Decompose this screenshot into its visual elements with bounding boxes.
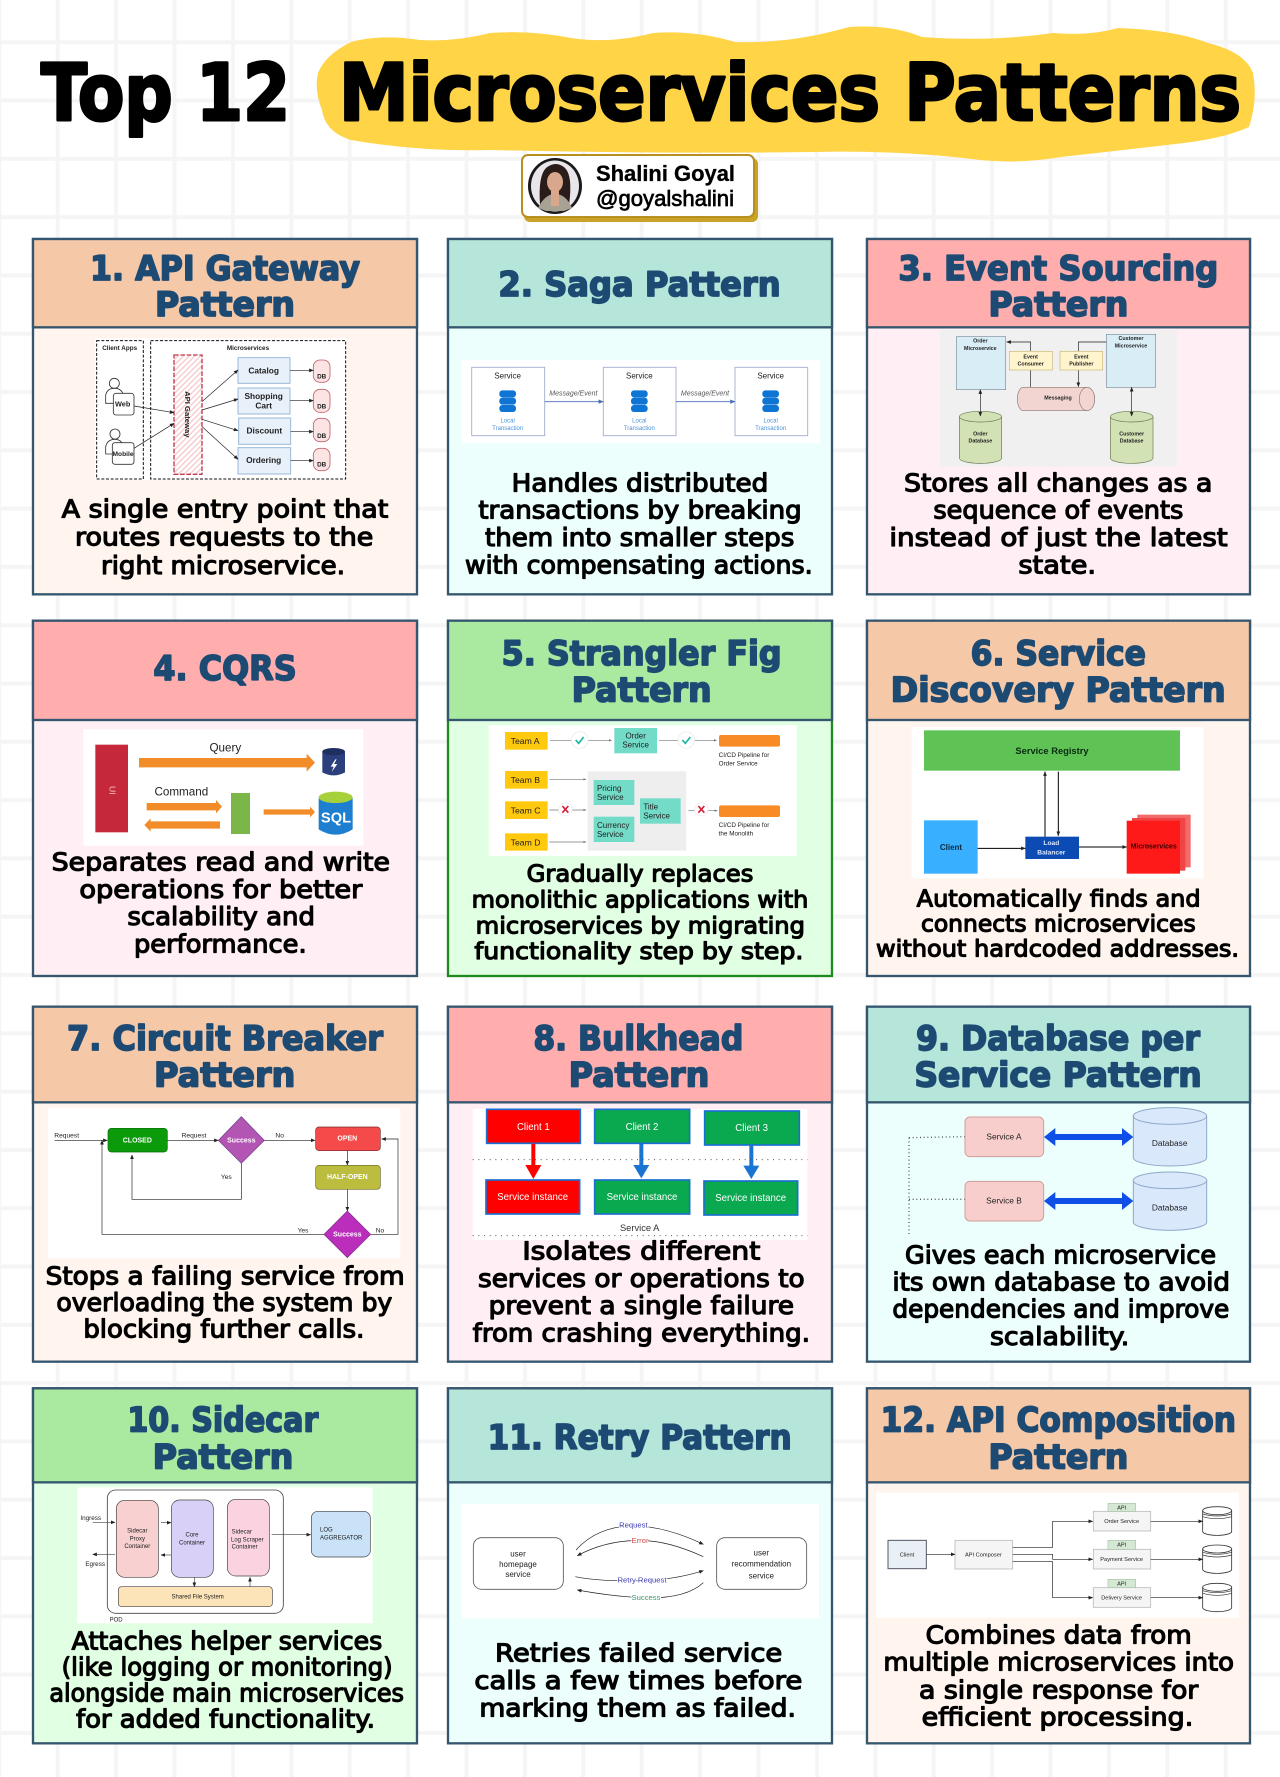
diagram: strangler fig: [489, 725, 797, 856]
diagram: bulkhead: Client 1: [517, 1122, 550, 1133]
diagram: circuit breaker: Yes: [221, 1174, 232, 1181]
panel 12: API Composition Pattern: [867, 1388, 1250, 1743]
diagram: service discovery: Service Registry: [1015, 746, 1089, 756]
author name: Shalini Goyal: [596, 161, 735, 186]
heading: [881, 1401, 1236, 1477]
description: microservices by migrating: [476, 911, 805, 939]
heading: Service Pattern: [914, 1056, 1202, 1096]
description: [892, 1240, 1230, 1351]
diagram: circuit breaker: No: [376, 1227, 385, 1234]
diagram: retry: [462, 1504, 819, 1618]
diagram: event sourcing: Customer: [1119, 336, 1143, 342]
diagram: database per service: Database: [1152, 1138, 1188, 1148]
panel frame: [33, 1388, 417, 1743]
heading: Pattern: [988, 1437, 1128, 1477]
diagram: circuit breaker: Request: [182, 1133, 207, 1140]
diagram: saga services: Transaction: [624, 426, 655, 432]
panel 3: Event Sourcing Pattern: [867, 239, 1250, 594]
diagram: strangler fig: Service: [622, 741, 650, 750]
diagram: service discovery: [912, 727, 1203, 878]
diagram: API gateway: Shopping: [244, 391, 283, 401]
diagram: API composition: Delivery Service: [1101, 1595, 1142, 1601]
diagram: API gateway: Microservices: [227, 345, 270, 352]
diagram: retry: user: [510, 1550, 526, 1559]
diagram: strangler fig: Currency: [597, 821, 629, 830]
diagram: strangler fig: Service: [597, 793, 624, 802]
diagram: retry: Error: [631, 1536, 649, 1545]
description: [46, 1261, 405, 1343]
diagram: event sourcing: Publisher: [1069, 362, 1093, 368]
diagram: strangler fig: CI/CD Pipeline for: [719, 752, 769, 759]
heading: [90, 249, 360, 325]
diagram: circuit breaker: No: [275, 1133, 284, 1140]
diagram: retry: recommendation: [732, 1560, 791, 1569]
diagram: sidecar: Container: [232, 1545, 258, 1551]
description: marking them as failed.: [479, 1694, 796, 1723]
description: them into smaller steps: [485, 523, 794, 552]
heading: [502, 634, 782, 711]
heading: 5. Strangler Fig: [502, 634, 782, 674]
diagram: service discovery: Client: [940, 843, 962, 852]
diagram: sidecar: Core: [186, 1533, 199, 1539]
diagram: saga services: Service: [757, 371, 785, 380]
panel 11: Retry Pattern: [448, 1388, 832, 1743]
diagram: strangler fig: Team D: [511, 838, 540, 848]
diagram: sidecar: Log Scraper: [231, 1537, 264, 1543]
author badge: [522, 155, 758, 222]
diagram: strangler fig: Order: [625, 732, 646, 741]
diagram: bulkhead: Service instance: [715, 1193, 786, 1204]
diagram: circuit breaker: [48, 1108, 400, 1258]
diagram: API composition: Client: [900, 1552, 915, 1558]
panel frame: [867, 1388, 1250, 1743]
diagram: bulkhead: Service A: [620, 1223, 660, 1233]
title highlight blob: [317, 26, 1255, 161]
heading: Pattern: [155, 285, 295, 325]
description: Gives each microservice: [905, 1240, 1216, 1269]
description: Handles distributed: [512, 469, 768, 498]
heading: [127, 1401, 319, 1477]
description: [465, 469, 813, 579]
diagram: saga services: Service: [494, 371, 522, 380]
panel 7: Circuit Breaker Pattern: [33, 1007, 417, 1362]
heading: 3. Event Sourcing: [898, 249, 1218, 289]
diagram: API gateway: Web: [115, 400, 131, 409]
heading: Pattern: [988, 285, 1128, 325]
diagram: event sourcing: Customer: [1119, 431, 1144, 437]
panel frame: [33, 1007, 417, 1362]
description: transactions by breaking: [478, 496, 802, 525]
panel frame: [448, 239, 832, 594]
diagram: API composition: API: [1117, 1542, 1127, 1548]
diagram: sidecar: Egress: [85, 1561, 105, 1568]
heading: Pattern: [154, 1056, 295, 1096]
diagram: sidecar: Container: [179, 1540, 205, 1546]
description: Separates read and write: [52, 848, 390, 877]
diagram: CQRS: Command: [154, 785, 208, 798]
panel 8: Bulkhead Pattern: [448, 1007, 832, 1362]
description: Automatically finds and: [917, 885, 1201, 913]
diagram: event sourcing: Event: [1074, 355, 1089, 361]
diagram: retry: user: [754, 1548, 769, 1557]
diagram: sidecar: Container: [124, 1544, 150, 1550]
diagram: sidecar: POD: [110, 1617, 123, 1623]
diagram: strangler fig: Team A: [511, 736, 540, 746]
diagram: API gateway: API Gateway: [183, 391, 192, 438]
diagram: strangler fig: Order Service: [719, 760, 758, 767]
diagram: bulkhead: Service instance: [497, 1192, 568, 1203]
diagram: event sourcing: Consumer: [1017, 362, 1044, 368]
diagram: API gateway: [95, 338, 347, 480]
diagram: circuit breaker: Request: [54, 1133, 79, 1140]
diagram: API composition: API: [1117, 1581, 1127, 1587]
heading: 9. Database per: [916, 1019, 1200, 1059]
description: [52, 848, 390, 958]
description: scalability.: [990, 1322, 1129, 1351]
description: from crashing everything.: [473, 1319, 810, 1348]
description: [62, 494, 389, 580]
diagram: circuit breaker: Success: [227, 1137, 256, 1144]
description: for added functionality.: [76, 1705, 375, 1734]
description: [876, 885, 1239, 963]
diagram: sidecar: Sidecar: [232, 1529, 252, 1535]
description: (like logging or monitoring): [62, 1653, 393, 1682]
diagram: event sourcing: Database: [1120, 439, 1144, 445]
diagram: strangler fig: Service: [643, 811, 671, 820]
description: connects microservices: [921, 910, 1196, 938]
description: calls a few times before: [474, 1666, 802, 1695]
diagram: database per service: Service B: [986, 1196, 1022, 1206]
diagram: API gateway: DB: [317, 404, 327, 411]
heading: 8. Bulkhead: [533, 1019, 743, 1059]
description: Stores all changes as a: [904, 469, 1212, 498]
description: state.: [1018, 550, 1096, 579]
panel frame: [867, 621, 1250, 976]
diagram: sidecar: [77, 1487, 373, 1623]
heading: [914, 1019, 1202, 1096]
diagram: event sourcing: [940, 330, 1177, 467]
diagram: API gateway: Cart: [255, 401, 272, 411]
panel 1: API Gateway Pattern: [33, 239, 417, 594]
panel 10: Sidecar Pattern: [33, 1388, 417, 1743]
diagram: database per service: Service A: [986, 1131, 1022, 1141]
diagram: CQRS: [83, 729, 363, 846]
diagram: sidecar: Ingress: [80, 1515, 101, 1522]
diagram: API gateway: DB: [317, 461, 327, 468]
diagram: strangler fig: the Monolith: [719, 831, 754, 838]
heading: 11. Retry Pattern: [488, 1418, 792, 1458]
diagram: event sourcing: Messaging: [1044, 395, 1072, 401]
diagram: saga services: Local: [764, 419, 778, 425]
diagram: saga services: Message/Event: [549, 391, 598, 398]
description: Stops a failing service from: [46, 1261, 405, 1290]
diagram: saga services: Message/Event: [681, 391, 730, 398]
diagram: event sourcing: Event: [1023, 355, 1038, 361]
heading: [533, 1019, 743, 1096]
panel frame: [867, 239, 1250, 594]
diagram: API gateway: DB: [317, 433, 327, 440]
diagram: saga services: Service: [626, 371, 653, 380]
diagram: sidecar: AGGREGATOR: [320, 1535, 363, 1541]
description: Retries failed service: [495, 1639, 782, 1668]
diagram: service discovery: Balancer: [1037, 849, 1066, 856]
diagram: saga services: Transaction: [755, 426, 786, 432]
diagram: retry: Request: [619, 1521, 648, 1530]
diagram: event sourcing: Order: [973, 339, 988, 345]
diagram: event sourcing: Order: [973, 431, 988, 437]
diagram: CQRS: UI: [108, 786, 118, 795]
heading: Pattern: [572, 671, 712, 711]
heading: 12. API Composition: [881, 1401, 1236, 1441]
description: [889, 469, 1228, 579]
description: Gradually replaces: [527, 860, 753, 888]
heading: Pattern: [569, 1056, 709, 1096]
description: monolithic applications with: [472, 886, 808, 914]
author handle: @goyalshalini: [596, 186, 734, 211]
heading: [891, 634, 1226, 711]
description: services or operations to: [478, 1264, 805, 1293]
description: performance.: [134, 929, 307, 958]
diagram: circuit breaker: Yes: [298, 1227, 309, 1234]
diagram: retry: service: [749, 1571, 775, 1580]
title word: Top 12: Top 12: [41, 49, 290, 139]
diagram: circuit breaker: CLOSED: [123, 1137, 152, 1144]
panel 4: CQRS: [33, 621, 417, 976]
diagram: API gateway: Mobile: [112, 451, 134, 458]
panel 2: Saga Pattern: [448, 239, 832, 594]
diagram: bulkhead: [473, 1109, 807, 1240]
panel frame: [867, 1007, 1250, 1362]
diagram: database per service: [909, 1108, 1207, 1237]
diagram: sidecar: Shared File System: [172, 1594, 224, 1600]
diagram: service discovery: Load: [1043, 840, 1059, 847]
description: routes requests to the: [75, 523, 373, 552]
diagram: API gateway: DB: [317, 374, 327, 381]
diagram: API composition: [876, 1493, 1239, 1618]
heading: 7. Circuit Breaker: [67, 1019, 383, 1059]
diagram: circuit breaker: Success: [333, 1232, 362, 1239]
description: operations for better: [79, 875, 363, 904]
diagram: retry: homepage: [499, 1560, 537, 1569]
description: instead of just the latest: [889, 523, 1228, 552]
diagram: strangler fig: Title: [643, 802, 659, 811]
diagram: sidecar: LOG: [320, 1528, 333, 1534]
description: overloading the system by: [56, 1288, 392, 1317]
description: multiple microservices into: [883, 1648, 1234, 1677]
description: functionality step by step.: [474, 937, 803, 965]
diagram: strangler fig: CI/CD Pipeline for: [719, 822, 769, 829]
description: dependencies and improve: [892, 1295, 1229, 1324]
diagram: sidecar: Sidecar: [127, 1529, 147, 1535]
diagram: API gateway: Ordering: [246, 455, 281, 465]
panel frame: [33, 621, 417, 976]
panel frame: [33, 239, 417, 594]
description: scalability and: [127, 902, 315, 931]
diagram: event sourcing: Microservice: [964, 346, 997, 352]
description: its own database to avoid: [892, 1268, 1230, 1297]
description: right microservice.: [101, 551, 345, 580]
diagram: CQRS: SQL: [321, 811, 351, 827]
diagram: saga services: Local: [632, 419, 646, 425]
diagram: bulkhead: Client 3: [735, 1123, 768, 1134]
description: efficient processing.: [922, 1703, 1193, 1732]
diagram: strangler fig: Pricing: [597, 784, 621, 793]
description: [472, 860, 808, 965]
diagram: saga services: Local: [501, 419, 515, 425]
diagram: saga services: Transaction: [492, 426, 523, 432]
heading: 6. Service: [971, 634, 1146, 674]
diagram: API gateway: Catalog: [248, 365, 279, 375]
diagram: bulkhead: Service instance: [607, 1192, 677, 1203]
panel 6: Service Discovery Pattern: [867, 621, 1250, 976]
heading: [67, 1019, 383, 1096]
diagram: API gateway: Discount: [247, 426, 282, 436]
heading: 4. CQRS: [153, 649, 297, 689]
diagram: API composition: API Composer: [965, 1552, 1002, 1558]
description: [49, 1626, 404, 1734]
description: Attaches helper services: [72, 1626, 382, 1655]
heading: [898, 249, 1218, 325]
diagram: CQRS: Query: [209, 742, 241, 755]
title: Top 12 Microservices Patterns: [41, 26, 1255, 161]
diagram: strangler fig: Team B: [511, 775, 540, 785]
description: blocking further calls.: [83, 1314, 364, 1343]
diagram: retry: Retry Request: [618, 1576, 667, 1585]
description: Isolates different: [522, 1236, 761, 1265]
diagram: API composition: Payment Service: [1100, 1557, 1143, 1563]
description: Combines data from: [926, 1620, 1192, 1649]
heading: 1. API Gateway: [90, 249, 360, 289]
diagram: circuit breaker: OPEN: [337, 1136, 357, 1143]
diagram: API composition: Order Service: [1104, 1519, 1139, 1525]
heading: Pattern: [153, 1437, 293, 1477]
description: sequence of events: [933, 496, 1183, 525]
heading: Discovery Pattern: [891, 671, 1226, 711]
diagram: API gateway: Client Apps: [102, 345, 138, 352]
panel 9: Database per Service Pattern: [867, 1007, 1250, 1362]
diagram: strangler fig: Team C: [511, 805, 540, 815]
description: prevent a single failure: [489, 1291, 794, 1320]
description: [883, 1620, 1234, 1732]
diagram: circuit breaker: HALF-OPEN: [327, 1174, 368, 1181]
description: a single response for: [919, 1675, 1199, 1704]
description: [474, 1639, 802, 1723]
diagram: event sourcing: Database: [968, 439, 992, 445]
heading: 2. Saga Pattern: [498, 265, 781, 305]
panel frame: [448, 1388, 832, 1743]
diagram: sidecar: Proxy: [130, 1537, 145, 1543]
description: A single entry point that: [62, 494, 389, 523]
diagram: API composition: API: [1117, 1505, 1127, 1511]
diagram: retry: service: [505, 1570, 531, 1579]
icon: author avatar: [528, 158, 582, 214]
panel 5: Strangler Fig Pattern: [448, 621, 832, 976]
diagram: bulkhead: Client 2: [626, 1122, 658, 1133]
diagram: service discovery: Microservices: [1131, 842, 1177, 851]
diagram: database per service: Database: [1152, 1202, 1188, 1212]
diagram: saga services: [462, 360, 820, 443]
description: with compensating actions.: [465, 550, 813, 579]
heading: 10. Sidecar: [127, 1401, 319, 1441]
description: without hardcoded addresses.: [876, 935, 1239, 963]
panel frame: [448, 1007, 832, 1362]
panel frame: [448, 621, 832, 976]
diagram: retry: Success: [632, 1593, 661, 1602]
description: alongside main microservices: [49, 1679, 404, 1708]
diagram: strangler fig: Service: [597, 830, 624, 839]
description: [473, 1236, 810, 1348]
diagram: event sourcing: Microservice: [1115, 343, 1147, 349]
